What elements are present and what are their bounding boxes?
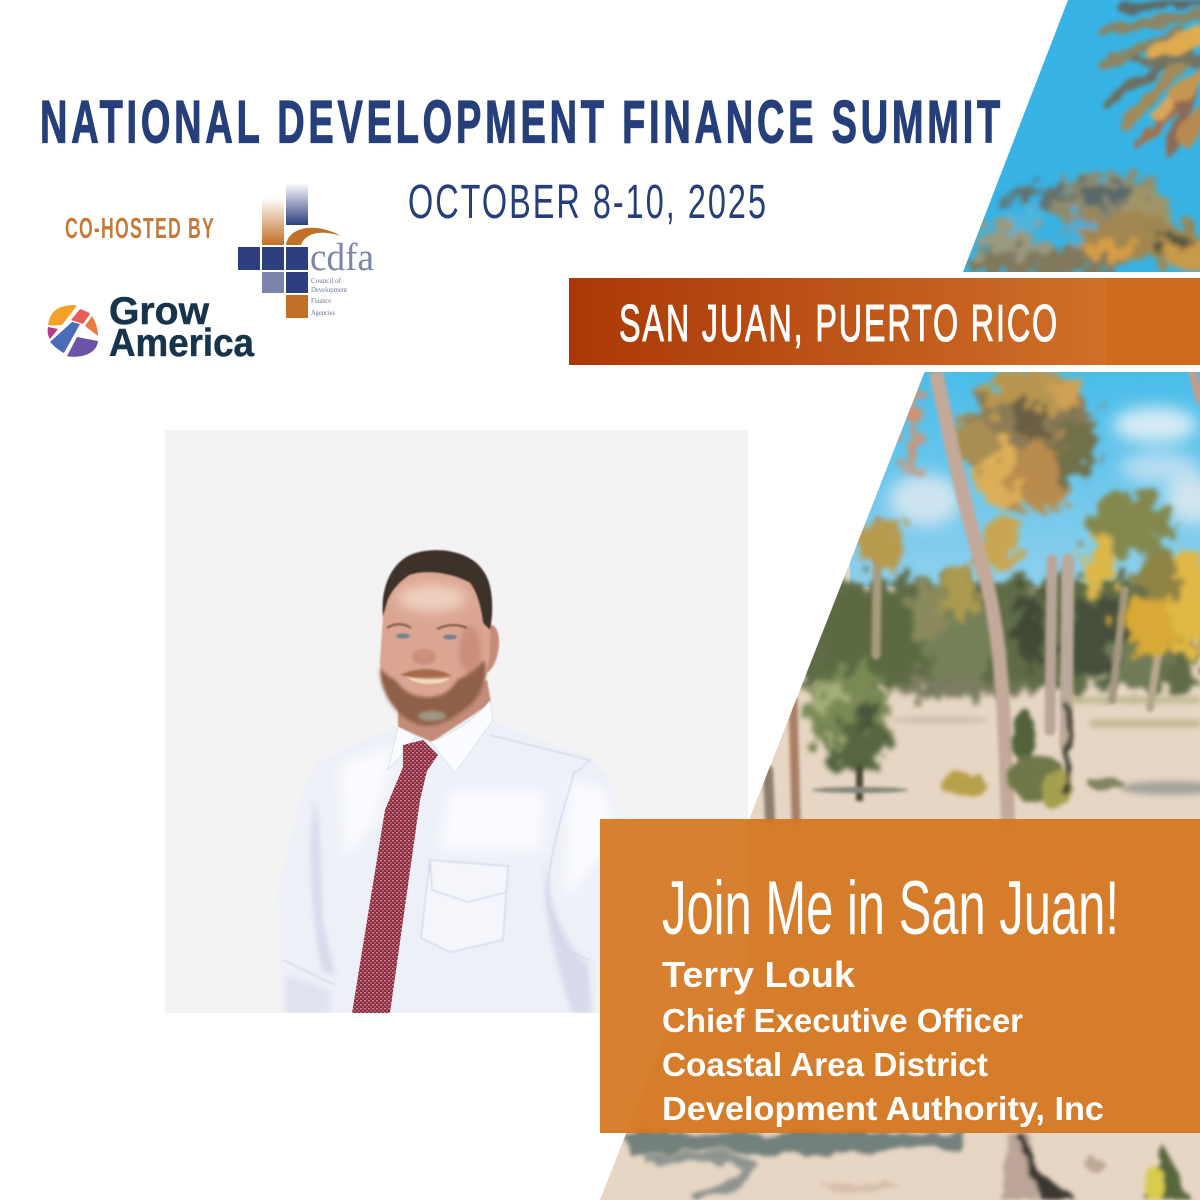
eyes [396,633,410,639]
photo: upper palm section [950,0,1200,276]
logo: Grow America [48,290,254,365]
head [380,550,499,726]
logo mark [48,305,98,357]
co-hosted by label: CO-HOSTED BY [65,213,215,245]
subheading: dates: OCTOBER 8-10, 2025 [408,176,768,229]
organization line 1: Coastal Area District [662,1046,988,1083]
cheek shading [459,626,481,674]
chin grey [418,711,446,721]
main palm trunk [936,372,1008,825]
face [379,571,491,714]
wordmark: Grow [109,290,210,333]
shirt folds and pocket [283,735,590,985]
bush [806,667,890,771]
ground plants [945,705,1125,808]
nose [412,649,436,665]
moustache [400,669,452,678]
foreground shadows and plant below the callout [625,1133,1190,1200]
portrait panel [165,430,748,1013]
shirt highlights [342,752,608,884]
ear [484,625,499,675]
location banner [563,272,1200,371]
speaker title: Chief Executive Officer [662,1002,1023,1039]
shirt shading [285,800,592,1013]
collar [388,727,416,770]
beach photo background: diagonal palm tree image [590,0,1200,1200]
beard [380,660,486,726]
logo: CDFA: Agencies [311,308,335,317]
hair [383,550,492,630]
speaker name: Terry Louk [662,954,856,995]
trunk group [1050,560,1052,730]
neck [398,680,491,742]
logo: CDFA: Development [311,285,348,294]
organization line 2: Development Authority, Inc [662,1090,1104,1127]
forehead highlight [398,584,466,612]
logo: CDFA: Council of [311,276,341,285]
logo: Grow America: America [109,322,254,365]
smile [407,677,450,684]
logo: CDFA [238,183,374,318]
portrait of Terry Louk [282,549,611,1013]
shirt [278,700,665,1013]
bush stem and shadow [812,765,908,801]
logo: CDFA: cdfa [310,236,374,279]
callout box: join message [600,819,1200,1133]
photo: lower beach section [590,368,1200,1200]
logo: CDFA: Finance [311,296,332,305]
necktie [352,740,438,1013]
